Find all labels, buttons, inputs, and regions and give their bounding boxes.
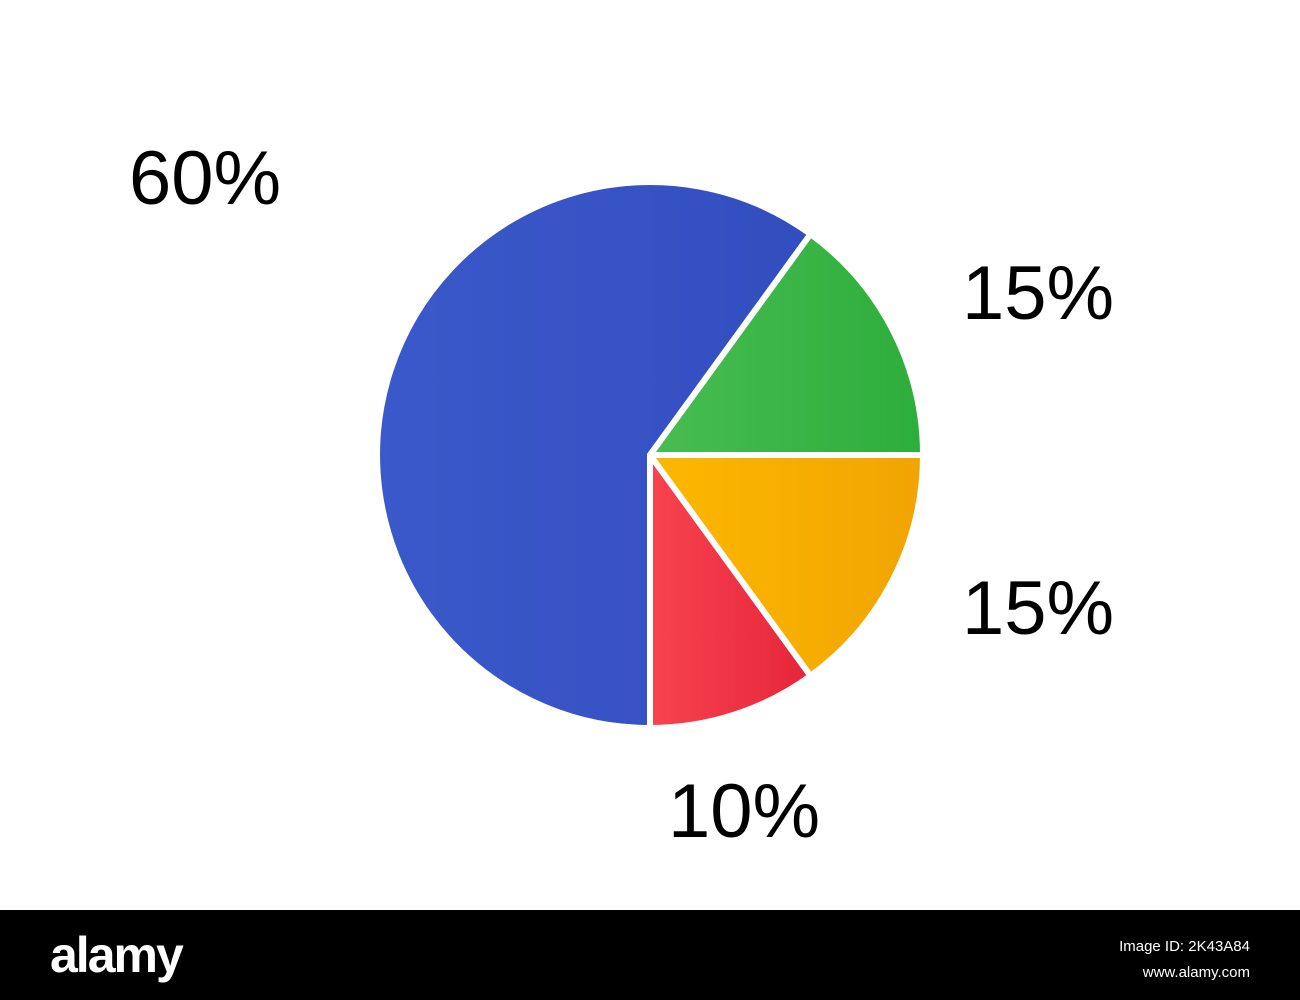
slice: red 10%: [650, 455, 810, 728]
slice: yellow 15%: [650, 455, 923, 676]
label: 15% yellow: 15%: [962, 566, 1114, 651]
slice: green 15%: [650, 234, 923, 455]
label: 60%: 60%: [129, 136, 281, 221]
footer image id: [1119, 938, 1250, 981]
label: 10%: 10%: [668, 769, 820, 854]
footer image id: www.alamy.com: [1143, 964, 1250, 981]
footer logo: alamy: [50, 927, 182, 983]
footer image id: Image ID: 2K43A84: [1119, 938, 1250, 955]
footer bar: [0, 910, 1300, 1000]
slice: blue 60%: [377, 182, 810, 728]
label: 15% green: 15%: [962, 251, 1114, 336]
